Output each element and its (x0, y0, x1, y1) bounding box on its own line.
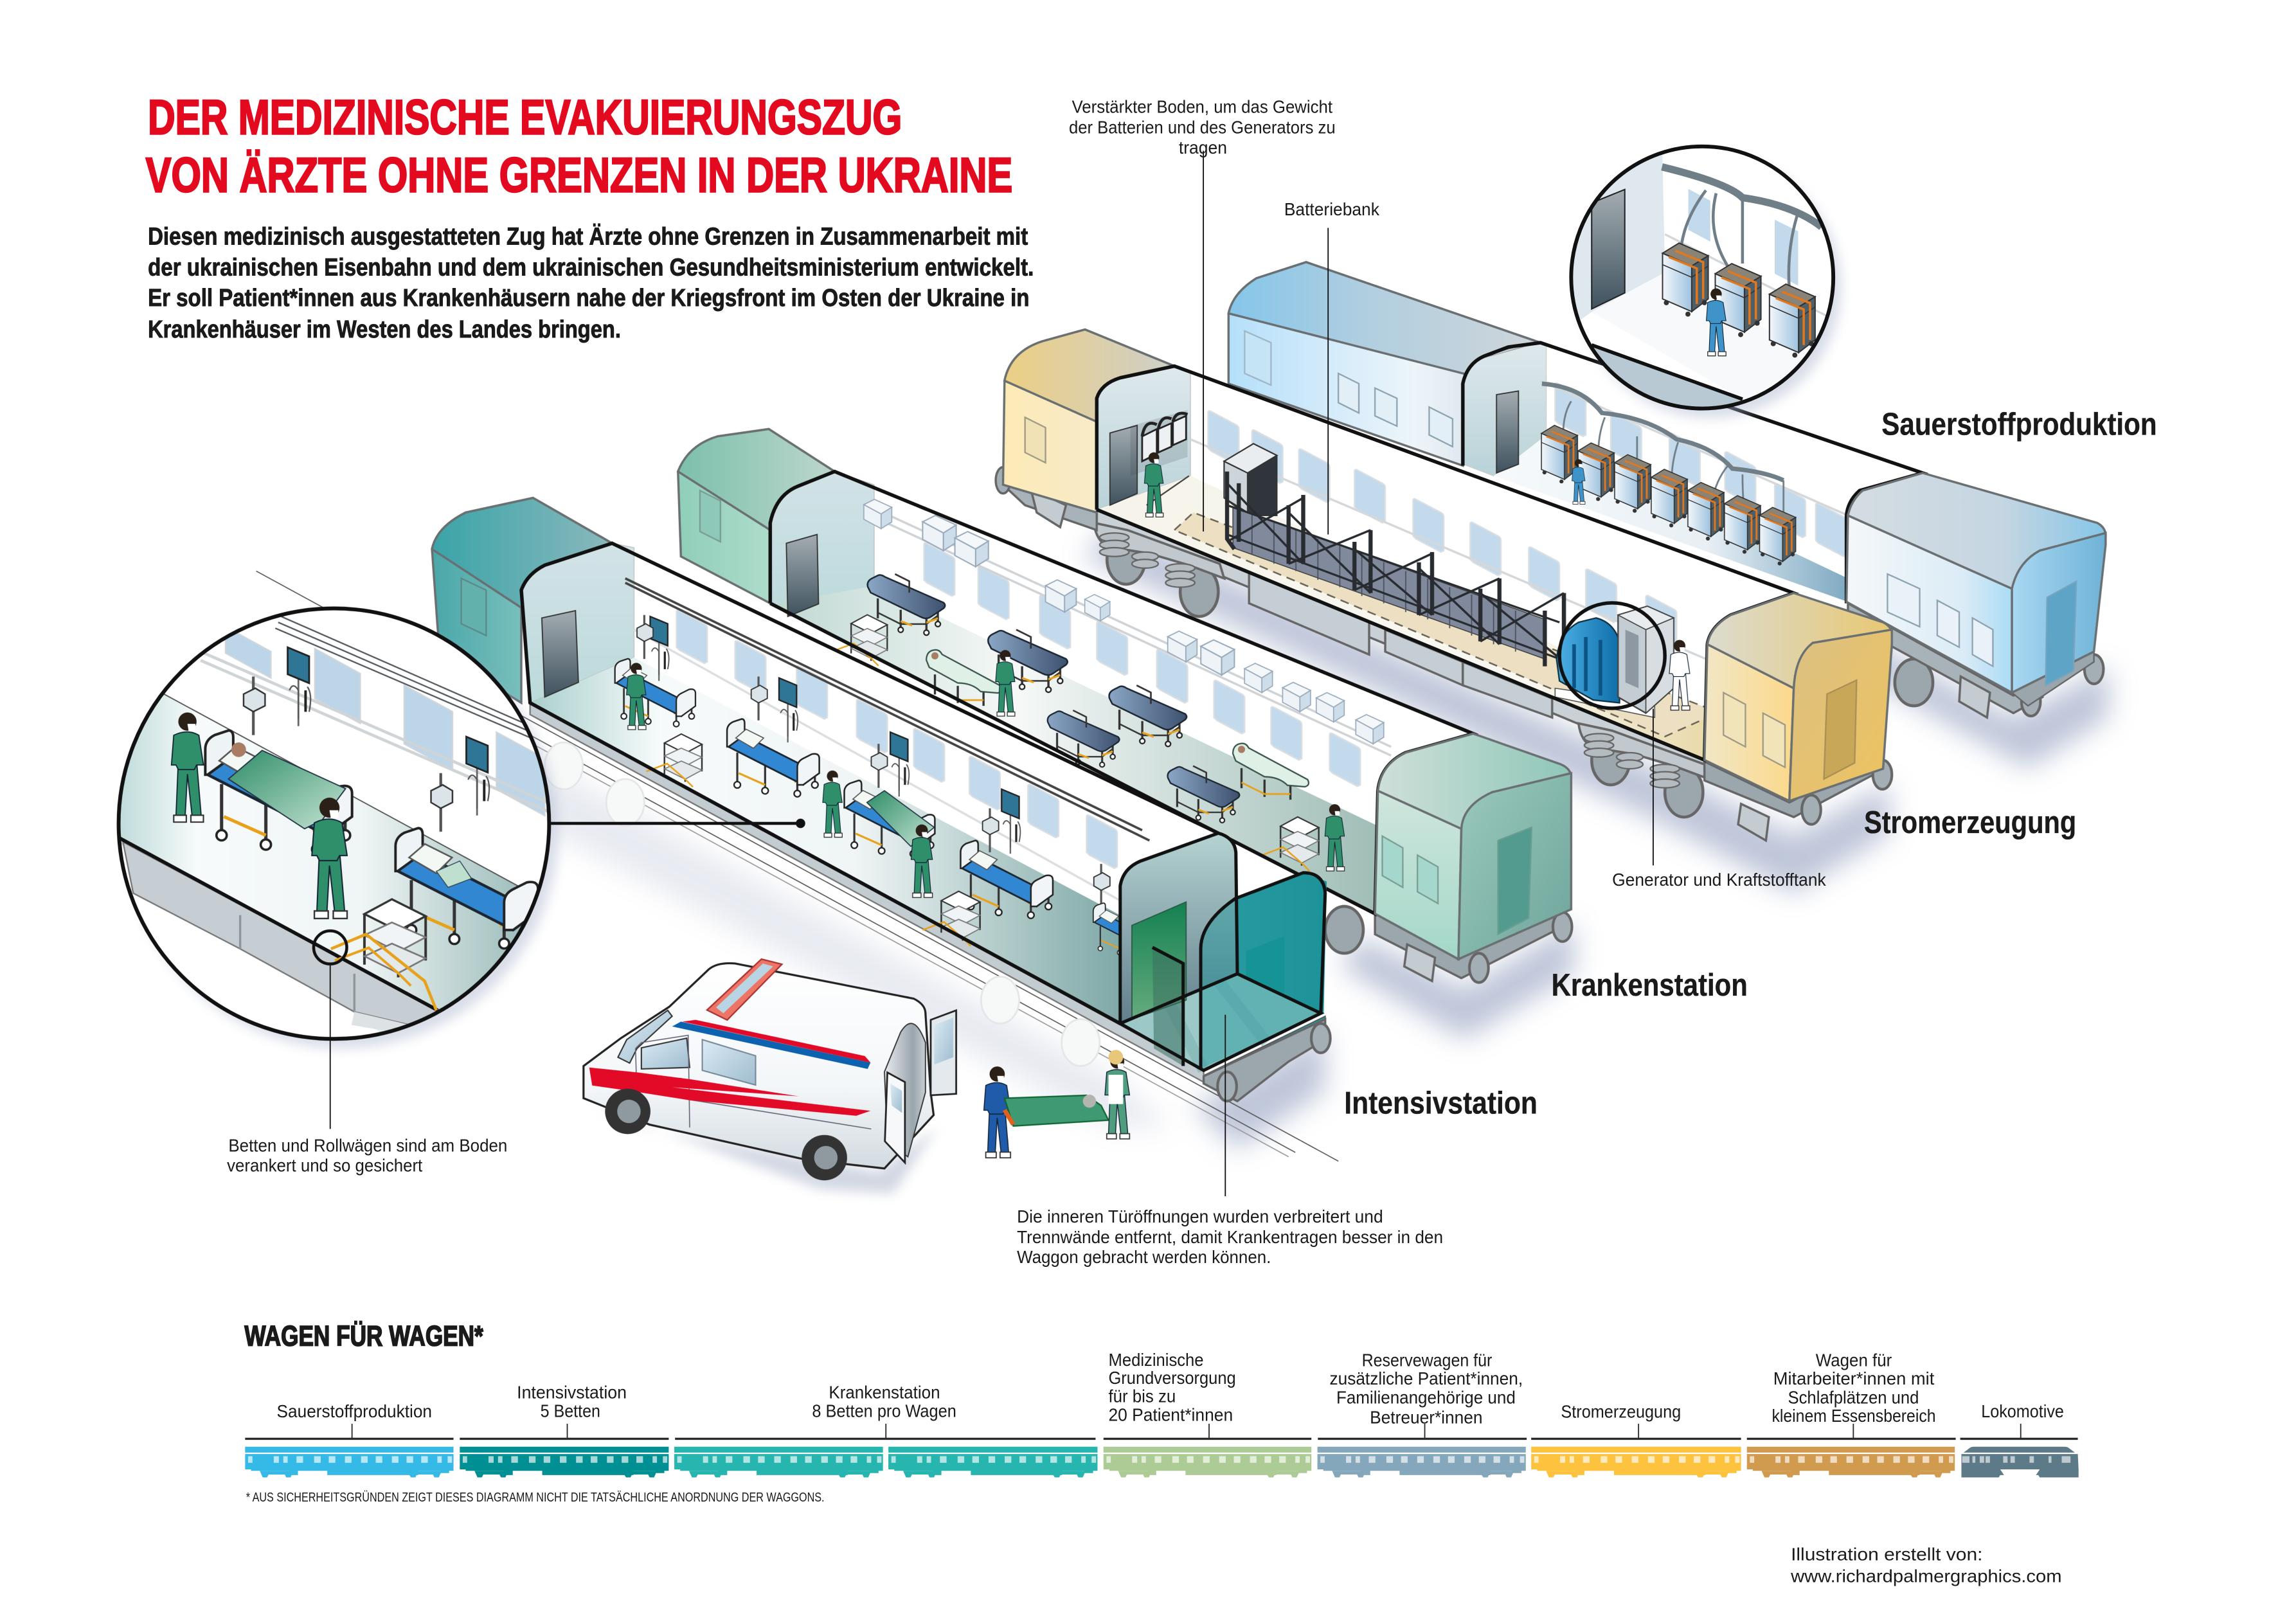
wagon labels: Schlafplätzen und (1788, 1387, 1919, 1407)
credits: www.richardpalmergraphics.com (1790, 1566, 2062, 1586)
wagon: ward 1 (674, 1447, 883, 1478)
car: Krankenstation (678, 429, 1572, 983)
small circle anchor (314, 931, 346, 964)
wagon labels: Stromerzeugung (1561, 1402, 1681, 1422)
intro text: Krankenhäuser im Westen des Landes bringen. (148, 316, 621, 343)
side rear door (885, 1072, 905, 1163)
interior A (521, 543, 1218, 1023)
circle undercarriage (123, 842, 438, 1025)
undercarriage B (1325, 906, 1572, 983)
magnifier: oxygen (1567, 132, 1845, 439)
leader to intensive car (549, 819, 805, 828)
wagon labels: Sauerstoffproduktion (277, 1401, 432, 1421)
circle strap (331, 934, 436, 1010)
wagon labels: 20 Patient*innen (1108, 1405, 1233, 1425)
wagon: reserve (1318, 1447, 1526, 1478)
underframe A (530, 703, 1204, 1082)
ghost wheels under intensive car (544, 742, 1100, 1066)
section labels: Krankenstation (1552, 968, 1748, 1003)
beds A (615, 659, 1157, 957)
ground shadows (527, 527, 2108, 1149)
section labels: Sauerstoffproduktion (1881, 408, 2157, 442)
annotations: Trennwände entfernt, damit Krankentragen besser in den (1017, 1227, 1443, 1247)
annotations: Die inneren Türöffnungen wurden verbreitert und (1017, 1206, 1383, 1226)
interior D (1463, 343, 1923, 602)
section labels: Intensivstation (1344, 1086, 1538, 1120)
rear door open (931, 1010, 956, 1095)
section labels: Stromerzeugung (1864, 805, 2076, 840)
title (146, 90, 1012, 202)
black cut outline C (1097, 366, 1794, 760)
electrical panel and person (1131, 410, 1189, 517)
stretchers and beds B (834, 574, 1345, 871)
oxygen door (1592, 190, 1625, 309)
annotations: verankert und so gesichert (227, 1155, 422, 1175)
oxygen hoses (1662, 167, 1822, 227)
panel: wagon by wagon (244, 1321, 2079, 1505)
generator circle (1559, 603, 1665, 708)
left end B (678, 429, 834, 604)
right end B (1375, 733, 1571, 959)
wagon labels: 5 Betten (541, 1401, 600, 1421)
car: Intensivstation (432, 498, 1331, 1101)
circle people (172, 712, 347, 919)
technician kneeling (1572, 459, 1585, 504)
wagon labels: Betreuer*innen (1370, 1407, 1483, 1427)
left end A (432, 498, 612, 703)
wagon labels: kleinem Essensbereich (1771, 1406, 1936, 1426)
engineer (1669, 640, 1690, 710)
ambulance windows (618, 1010, 755, 1085)
annotations: Verstärkter Boden, um das Gewicht (1072, 96, 1332, 116)
wagon labels: Intensivstation (517, 1383, 627, 1403)
wagon labels: Lokomotive (1981, 1401, 2064, 1421)
undercarriage D (1848, 604, 2103, 717)
intro text: der ukrainischen Eisenbahn und dem ukrainischen Gesundheitsministerium entwickelt. (148, 253, 1034, 280)
annotations: Waggon gebracht werden können. (1017, 1247, 1271, 1267)
ambulance wheels (605, 1089, 847, 1180)
generator and tank (1555, 606, 1674, 717)
credits: Illustration erstellt von: (1791, 1544, 1982, 1564)
left end C (1003, 330, 1174, 512)
interior C (1097, 366, 1794, 760)
wagon labels: für bis zu (1108, 1386, 1176, 1406)
paramedics and stretcher (984, 1050, 1129, 1158)
intro text: Er soll Patient*innen aus Krankenhäusern nahe der Kriegsfront im Osten der Ukraine in (148, 284, 1029, 311)
wagon labels: Reservewagen für (1362, 1350, 1492, 1370)
cabinet (1224, 444, 1277, 516)
wagon labels: Mitarbeiter*innen mit (1773, 1368, 1935, 1388)
magnifier: bed interior (116, 606, 562, 1053)
roof light (707, 959, 782, 1020)
car: Stromerzeugung (996, 330, 1892, 841)
undercarriage C (996, 467, 1892, 841)
stripes (672, 1021, 870, 1069)
footnote: * AUS SICHERHEITSGRÜNDEN ZEIGT DIESES DIAGRAMM NICHT DIE TATSÄCHLICHE ANORDNUNG DER WAGGONS. (246, 1491, 825, 1505)
wagon labels (277, 1350, 2064, 1427)
wagon labels: Medizinische (1108, 1350, 1204, 1370)
oxygen units large (1663, 243, 1709, 317)
ambulance rear opening (884, 1023, 926, 1157)
oxygen end wall (1567, 132, 1665, 330)
kneeling technician (1707, 289, 1726, 356)
floor band C (1097, 510, 1705, 776)
right end C (1705, 593, 1892, 801)
leader lines (330, 151, 1653, 1196)
circle beds (205, 730, 538, 986)
interior B (770, 472, 1473, 914)
circle monitors (244, 647, 489, 832)
wagon labels: Wagen für (1816, 1350, 1892, 1370)
wagon labels: 8 Betten pro Wagen (812, 1401, 956, 1421)
annotations: Generator und Kraftstofftank (1612, 870, 1826, 890)
black cut outline B (770, 472, 1473, 914)
intro text: Diesen medizinisch ausgestatteten Zug hat Ärzte ohne Grenzen in Zusammenarbeit mit (148, 222, 1028, 249)
wagon labels: Krankenstation (829, 1383, 940, 1403)
annotations: der Batterien und des Generators zu (1069, 117, 1336, 137)
right end D (1847, 473, 2106, 693)
annotations: tragen (1179, 138, 1227, 157)
medical staff A (627, 663, 933, 897)
wagon: basic care (1104, 1447, 1311, 1478)
locomotive (1961, 1447, 2079, 1478)
black cut outline A (521, 543, 1218, 1023)
wagon: staff (1747, 1447, 1955, 1478)
title: VON ÄRZTE OHNE GRENZEN IN DER UKRAINE (146, 148, 1012, 202)
intro text (148, 222, 1034, 343)
credits (1790, 1544, 2062, 1586)
wagon labels: Familienangehörige und (1336, 1387, 1516, 1407)
wagon: intensive (460, 1447, 668, 1478)
wagon: oxygen (245, 1447, 454, 1478)
hoses D (1542, 384, 1784, 542)
wagon: power (1531, 1447, 1741, 1478)
title: DER MEDIZINISCHE EVAKUIERUNGSZUG (148, 90, 902, 145)
oxygen windows (1689, 189, 1798, 285)
wagon: ward 2 (888, 1447, 1097, 1478)
oxygen units (1541, 426, 1796, 566)
wagon heading: WAGEN FÜR WAGEN* (244, 1321, 483, 1352)
rails (256, 571, 1338, 1161)
end section A (1120, 833, 1331, 1101)
storage boxes (864, 499, 1384, 744)
door outlines (636, 1036, 871, 1129)
black cut outline D (1463, 343, 1923, 604)
wagon labels: zusätzliche Patient*innen, (1329, 1368, 1523, 1388)
annotations: Batteriebank (1284, 199, 1379, 219)
wagon labels: Grundversorgung (1108, 1368, 1236, 1388)
annotations: Betten und Rollwägen sind am Boden (228, 1136, 507, 1156)
annotations (227, 96, 1826, 1267)
left end D (1228, 262, 1541, 465)
ambulance and stretcher shadows (593, 1106, 937, 1194)
circle windows (226, 627, 544, 816)
section labels (1344, 408, 2157, 1120)
battery bank (1227, 472, 1564, 667)
monitors and pumps A (637, 615, 1110, 908)
reinforced floor (1174, 512, 1713, 737)
circle floor (120, 695, 521, 1032)
car: Sauerstoffproduktion (1228, 262, 2106, 717)
bracket rules (245, 1424, 2078, 1439)
ambulance (584, 959, 956, 1180)
